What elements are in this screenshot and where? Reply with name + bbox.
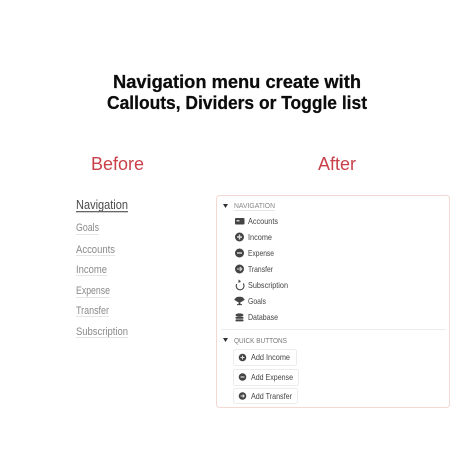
item: income: Income [76, 264, 107, 276]
icon: database [236, 313, 244, 321]
item: expense: Expense [76, 285, 110, 297]
icon: income [235, 232, 244, 242]
label: goals: Goals [248, 296, 266, 306]
title [107, 72, 367, 113]
button: add income: Add Income [251, 353, 290, 362]
label: income: Income [248, 232, 272, 242]
heading: after: After [318, 154, 356, 174]
button: add transfer [234, 388, 298, 404]
title: Callouts, Dividers or Toggle list [107, 93, 367, 113]
label: database: Database [248, 312, 278, 322]
item: accounts: Accounts [76, 244, 115, 256]
panel: after callout [216, 196, 450, 408]
label: subscription: Subscription [248, 280, 288, 290]
label: expense: Expense [248, 248, 274, 258]
item: goals: Goals [76, 222, 99, 234]
label: transfer: Transfer [248, 264, 273, 274]
panel: before list [76, 198, 128, 338]
icon: transfer [235, 264, 244, 274]
item: subscription: Subscription [76, 326, 128, 338]
icon: accounts [235, 218, 244, 224]
button: add income [234, 350, 296, 366]
title: Navigation menu create with [113, 72, 361, 92]
button: add expense [234, 370, 298, 386]
icon: goals [234, 297, 245, 305]
icon: subscription [236, 280, 244, 290]
button: add transfer: Add Transfer [251, 392, 292, 401]
navigation toggle heading [223, 201, 275, 211]
button: add expense: Add Expense [251, 373, 293, 382]
heading: before: Before [91, 154, 144, 174]
icon: expense [235, 248, 244, 258]
item: transfer: Transfer [76, 305, 109, 317]
label: accounts: Accounts [248, 216, 278, 226]
quick buttons toggle heading: QUICK BUTTONS [234, 336, 287, 345]
navigation toggle heading: NAVIGATION [234, 201, 275, 210]
active item: navigation: Navigation [76, 198, 128, 212]
